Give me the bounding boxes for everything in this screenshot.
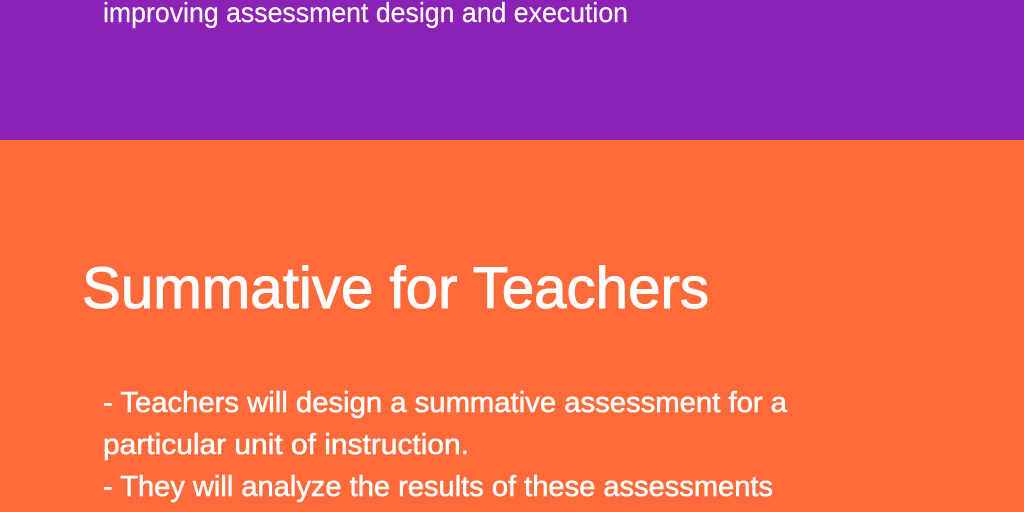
- panel: orange bottom section: [0, 140, 1024, 512]
- heading: Summative for Teachers: Summative for Teachers: [82, 256, 709, 321]
- text block: teacher bullet points: [103, 387, 788, 503]
- panel: purple top section: [0, 0, 1024, 140]
- text block: teacher bullet points: - They will analyze the results of these assessments: [103, 471, 773, 503]
- text block: teacher bullet points: particular unit of instruction.: [103, 429, 469, 461]
- text block: teacher bullet points: - Teachers will design a summative assessment for a: [103, 387, 788, 419]
